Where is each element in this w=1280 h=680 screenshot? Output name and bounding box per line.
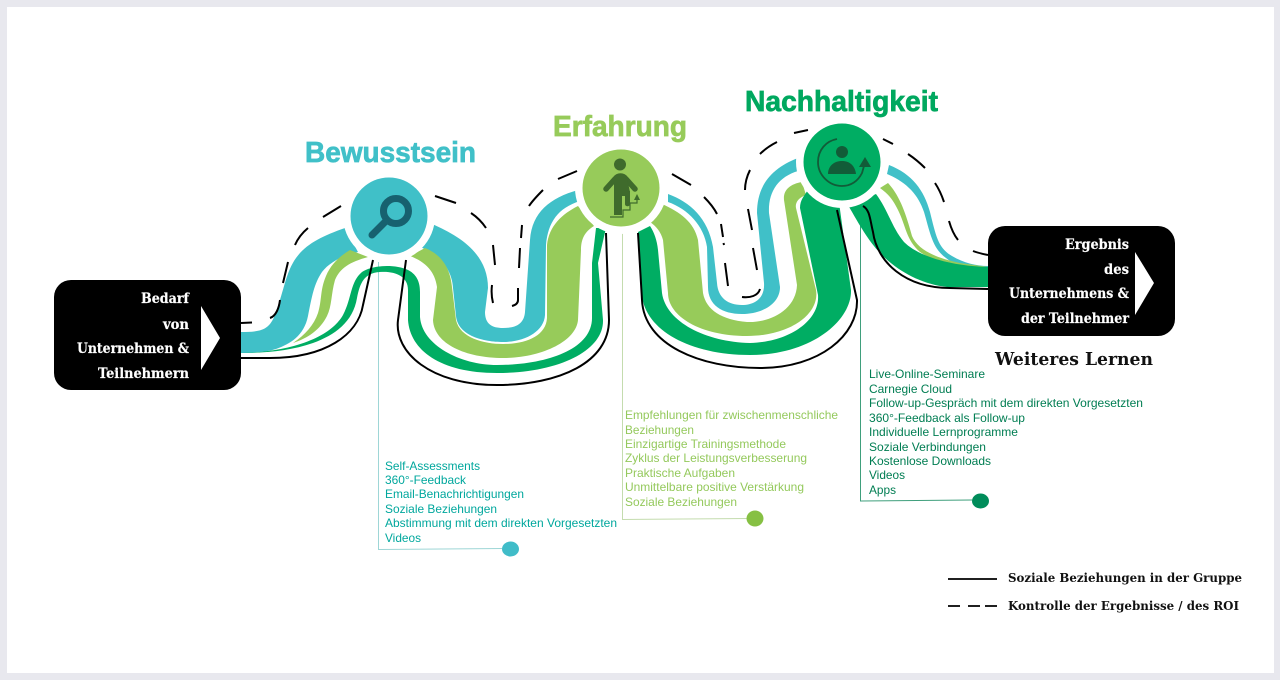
box text bbox=[1009, 237, 1130, 327]
list: Bewusstsein: 360°-Feedback bbox=[385, 473, 467, 487]
box text: des bbox=[1104, 262, 1129, 278]
ribbon: light green third stretch bbox=[650, 182, 816, 336]
box text: der Teilnehmer bbox=[1021, 311, 1130, 327]
connector: Nachhaltigkeit list bbox=[860, 215, 989, 508]
connector: Erfahrung list bbox=[622, 228, 764, 526]
icon: person climbing stairs bbox=[606, 158, 640, 217]
list: Bewusstsein: Self-Assessments bbox=[385, 459, 480, 473]
list: Nachhaltigkeit: 360°-Feedback als Follow-up bbox=[869, 411, 1025, 425]
list: Bewusstsein: Soziale Beziehungen bbox=[385, 502, 497, 516]
ribbon: teal final stretch bbox=[887, 165, 988, 268]
list: Erfahrung: Soziale Beziehungen bbox=[625, 495, 737, 509]
heading: Bewusstsein: Bewusstsein bbox=[305, 137, 476, 169]
list: Erfahrung bbox=[625, 408, 838, 509]
icon: person with cycle arrow bbox=[818, 139, 871, 186]
list: Bewusstsein: Abstimmung mit dem direkten Vorgesetzten bbox=[385, 516, 617, 530]
arrow bbox=[201, 306, 220, 370]
ring bbox=[796, 116, 888, 208]
step: Erfahrung bbox=[575, 142, 667, 234]
heading: Erfahrung: Erfahrung bbox=[553, 111, 687, 143]
list: Nachhaltigkeit: Follow-up-Gespräch mit dem direkten Vorgesetzten bbox=[869, 396, 1143, 410]
list: Erfahrung: Zyklus der Leistungsverbesserung bbox=[625, 451, 807, 465]
heading: Weiteres Lernen: Weiteres Lernen bbox=[994, 349, 1153, 370]
arrow bbox=[1135, 252, 1154, 315]
list: Nachhaltigkeit: Kostenlose Downloads bbox=[869, 454, 991, 468]
disc bbox=[582, 150, 660, 226]
ring bbox=[343, 170, 435, 262]
ribbon: light green left bbox=[293, 250, 368, 343]
list: Nachhaltigkeit: Soziale Verbindungen bbox=[869, 440, 986, 454]
list: Erfahrung: Empfehlungen für zwischenmenschliche bbox=[625, 408, 838, 422]
list: Nachhaltigkeit: Live-Online-Seminare bbox=[869, 367, 985, 381]
box text: Unternehmen & bbox=[77, 341, 189, 357]
box text bbox=[77, 291, 190, 382]
ribbon: teal second stretch bbox=[420, 190, 580, 342]
box text: von bbox=[162, 317, 189, 333]
ribbon: light green final stretch bbox=[880, 183, 988, 269]
list: Nachhaltigkeit: Apps bbox=[869, 483, 896, 497]
box text: Unternehmens & bbox=[1009, 286, 1129, 302]
list: Erfahrung: Praktische Aufgaben bbox=[625, 466, 735, 480]
icon: magnifying glass bbox=[372, 198, 408, 235]
ribbon group: learning path bbox=[241, 158, 988, 373]
step: Nachhaltigkeit bbox=[796, 116, 888, 208]
list: Erfahrung: Einzigartige Trainingsmethode bbox=[625, 437, 786, 451]
disc bbox=[804, 124, 880, 200]
box text: Bedarf bbox=[141, 291, 190, 307]
ribbon: teal left bbox=[241, 228, 358, 353]
list: Bewusstsein bbox=[385, 459, 617, 545]
legend: dashed line: Kontrolle der Ergebnisse / des ROI bbox=[1008, 598, 1239, 613]
list: Bewusstsein: Videos bbox=[385, 531, 421, 545]
dashed black line: ROI control bbox=[241, 130, 988, 323]
list: Nachhaltigkeit: Carnegie Cloud bbox=[869, 382, 952, 396]
box text: Teilnehmern bbox=[98, 366, 189, 382]
end box: Ergebnis bbox=[988, 226, 1175, 336]
heading: Nachhaltigkeit: Nachhaltigkeit bbox=[745, 86, 938, 118]
solid black line: social relations bbox=[241, 206, 988, 385]
list: Erfahrung: Unmittelbare positive Verstärkung bbox=[625, 480, 804, 494]
list: Nachhaltigkeit: Videos bbox=[869, 468, 905, 482]
legend: solid line: Soziale Beziehungen in der Gruppe bbox=[1008, 570, 1242, 585]
ribbon: light green second stretch bbox=[410, 206, 594, 358]
list: Nachhaltigkeit bbox=[869, 367, 1143, 497]
ring bbox=[575, 142, 667, 234]
box text: Ergebnis bbox=[1065, 237, 1129, 253]
step: Bewusstsein bbox=[343, 170, 435, 262]
connector: Bewusstsein list bbox=[378, 262, 519, 556]
ribbon: teal third stretch bbox=[668, 158, 798, 314]
start box: Bedarf bbox=[54, 280, 241, 390]
ribbon: green first stretch bbox=[241, 228, 606, 373]
ribbon: green final stretch bbox=[848, 194, 988, 287]
legend bbox=[948, 570, 1242, 613]
ribbon: green third stretch bbox=[638, 190, 851, 355]
list: Erfahrung: Beziehungen bbox=[625, 423, 694, 437]
disc bbox=[350, 178, 428, 254]
list: Nachhaltigkeit: Individuelle Lernprogramme bbox=[869, 425, 1018, 439]
list: Bewusstsein: Email-Benachrichtigungen bbox=[385, 487, 524, 501]
